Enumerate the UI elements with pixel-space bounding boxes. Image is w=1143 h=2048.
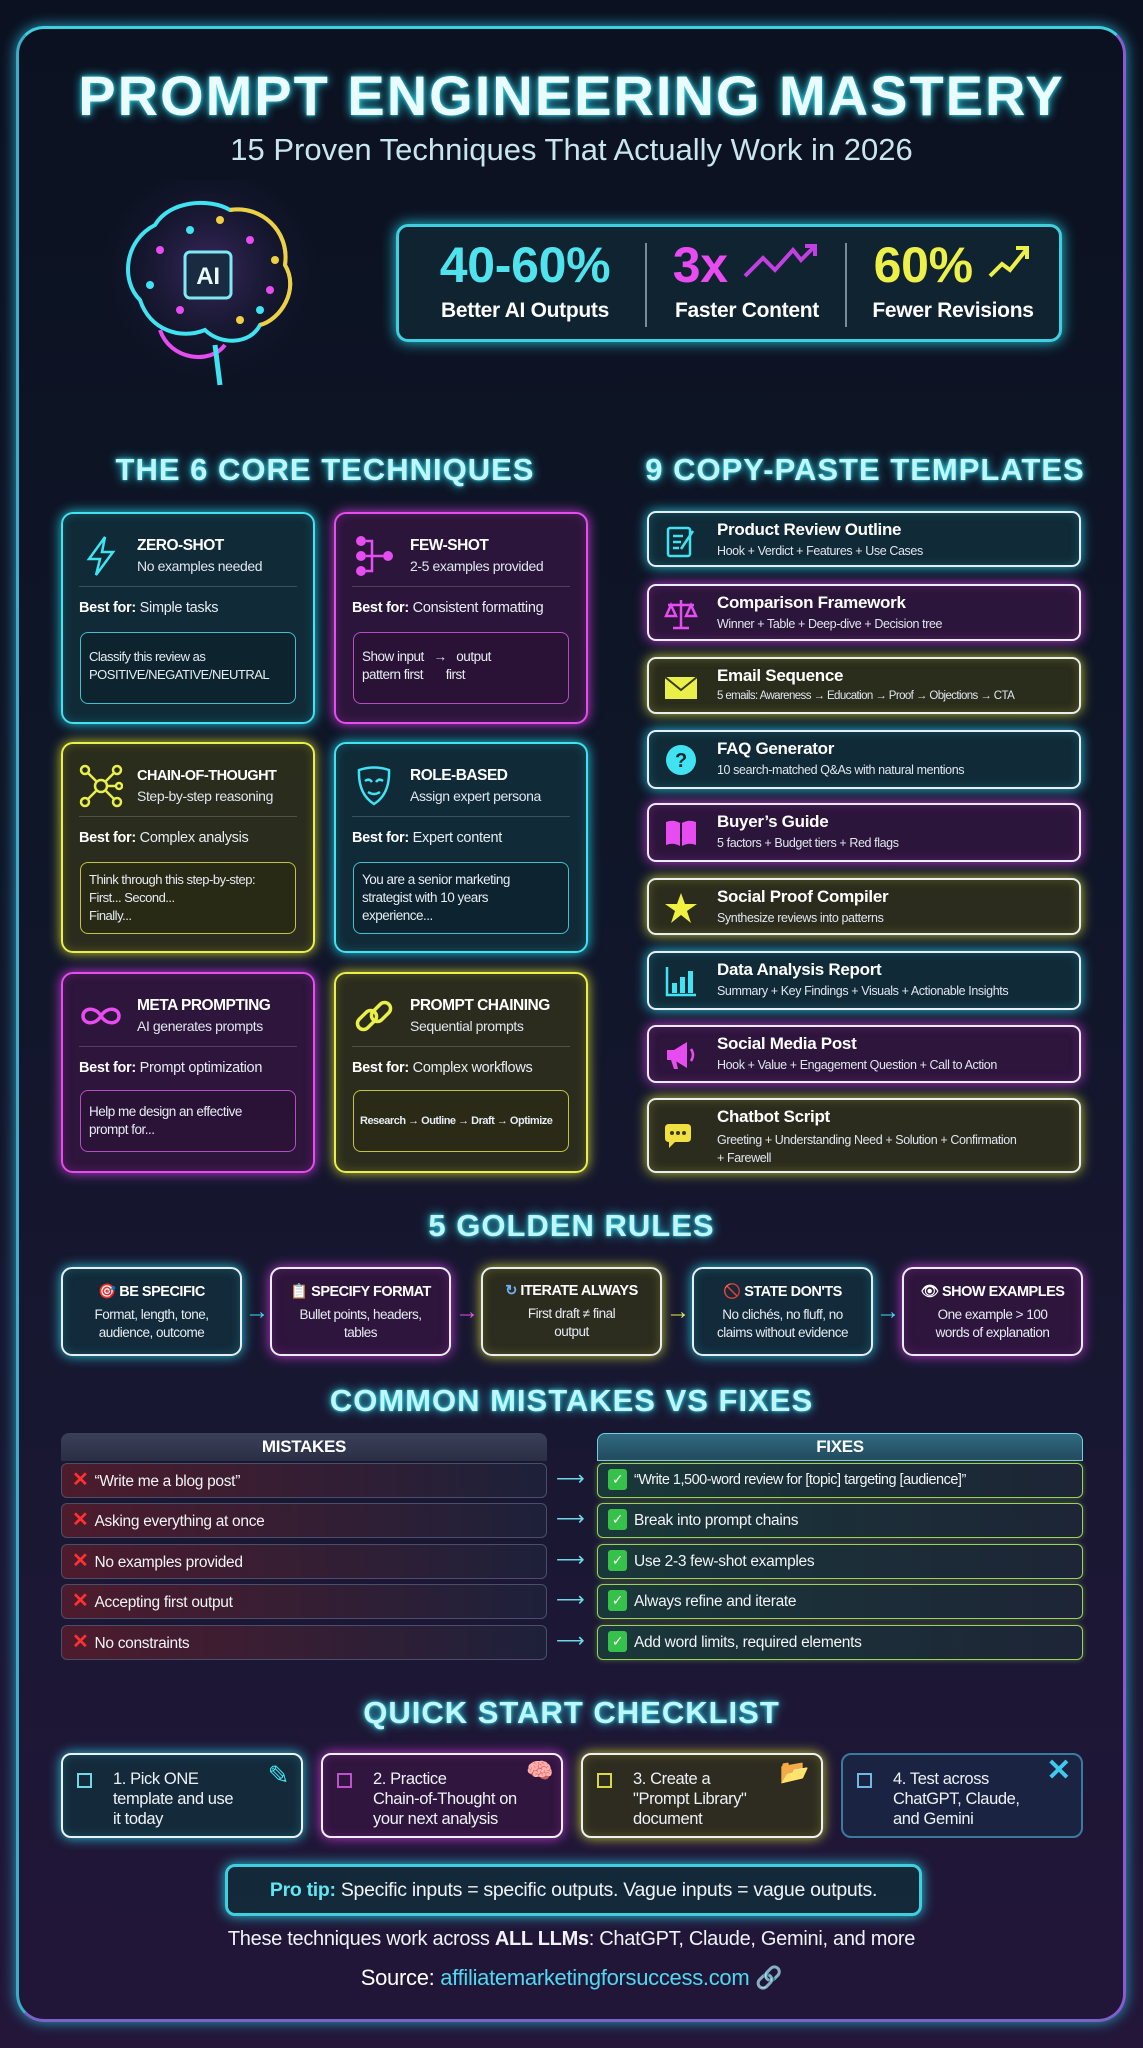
card: role-based: Assign expert persona: [410, 788, 541, 804]
stat: faster content: Faster Content: [675, 299, 819, 322]
arrow: →: [876, 1298, 900, 1325]
source: Source: affiliatemarketingforsuccess.com 🔗: [361, 1965, 782, 1990]
rule: be specific: [61, 1267, 242, 1356]
icon: network: [80, 764, 123, 808]
template: data analysis: Summary + Key Findings + Visuals + Actionable Insights: [717, 984, 1008, 998]
card: meta prompting: Help me design an effective: [89, 1104, 242, 1119]
arrow: →: [245, 1298, 269, 1325]
rule: state don'ts: 🚫 STATE DON'TS: [723, 1284, 842, 1300]
icon: book: [666, 820, 696, 846]
checklist item 4: ChatGPT, Claude,: [893, 1790, 1020, 1808]
checklist item 1: [61, 1753, 303, 1838]
icon: branches: [356, 536, 393, 576]
heading: quick start: QUICK START CHECKLIST: [363, 1695, 780, 1730]
stat: faster content: [673, 237, 819, 322]
icon: infinity: [81, 1008, 121, 1024]
rule: specify format: [270, 1267, 451, 1356]
text: Always refine and iterate: [634, 1593, 796, 1610]
rule: specify format: Bullet points, headers,: [299, 1307, 422, 1322]
template: buyer's guide: [647, 803, 1081, 862]
card: role-based: ROLE-BASED: [410, 767, 507, 784]
text: Use 2-3 few-shot examples: [634, 1553, 814, 1570]
card: zero-shot: [61, 512, 315, 724]
rule: state don'ts: [692, 1267, 873, 1356]
subtitle: 15 Proven Techniques That Actually Work in 2026: [230, 132, 913, 167]
template: data analysis: Data Analysis Report: [717, 960, 881, 979]
checklist item 2: your next analysis: [373, 1810, 498, 1828]
template: buyer's guide: 5 factors + Budget tiers + Red flags: [717, 836, 899, 850]
card: meta prompting: prompt for...: [89, 1122, 155, 1137]
template: email: Email Sequence: [717, 666, 843, 685]
rule: iterate always: First draft ≠ final: [528, 1306, 615, 1321]
icon: AI brain: AI: [196, 263, 220, 290]
text: ⟶: [556, 1630, 584, 1652]
rule: iterate always: ↻ ITERATE ALWAYS: [505, 1283, 638, 1299]
arrow: →: [455, 1298, 479, 1325]
checklist item 1: 1. Pick ONE: [113, 1770, 198, 1788]
checklist item 3: [581, 1753, 823, 1838]
card: few-shot: Best for: Consistent formatting: [352, 600, 543, 616]
stats panel: [396, 224, 1062, 342]
rule: specify format: 📋 SPECIFY FORMAT: [290, 1284, 431, 1300]
text: ✕ Asking everything at once: [72, 1509, 264, 1531]
text: ⟶: [556, 1589, 584, 1611]
template: product review: [647, 511, 1081, 567]
text: ✓: [612, 1592, 623, 1608]
icon: lightning: [86, 536, 116, 576]
card: chain-of-thought: CHAIN-OF-THOUGHT: [137, 768, 276, 784]
stat: faster content: 3x: [673, 237, 728, 293]
checklist item 2: Chain-of-Thought on: [373, 1790, 517, 1808]
stat: fewer revisions: Fewer Revisions: [872, 299, 1034, 322]
text: ✓: [612, 1633, 623, 1649]
icon: AI brain: [126, 192, 292, 386]
card: prompt chaining: Sequential prompts: [410, 1018, 523, 1034]
template: product review: Product Review Outline: [717, 520, 901, 539]
checklist item 4: ✕: [1046, 1754, 1071, 1787]
text: ⟶: [556, 1508, 584, 1530]
card: chain-of-thought: [61, 742, 315, 953]
stat: fewer revisions: [872, 237, 1034, 322]
card: role-based: experience...: [362, 908, 433, 923]
card: role-based: strategist with 10 years: [362, 890, 488, 905]
card: zero-shot: ZERO-SHOT: [137, 537, 224, 554]
card: zero-shot: Best for: Simple tasks: [79, 600, 218, 616]
card: zero-shot: No examples needed: [137, 558, 262, 574]
pro tip callout: Pro tip: Specific inputs = specific outputs. Vague inputs = vague outputs.: [270, 1879, 877, 1901]
rule: be specific: 🎯 BE SPECIFIC: [98, 1284, 205, 1300]
text: ✕ “Write me a blog post”: [72, 1469, 240, 1491]
icon: scales: [664, 600, 698, 630]
checklist item 2: 2. Practice: [373, 1770, 447, 1788]
template: comparison: Winner + Table + Deep-dive + Decision tree: [717, 617, 942, 631]
card: few-shot: [334, 512, 588, 724]
checklist item 4: [841, 1753, 1083, 1838]
pro tip callout: [225, 1864, 922, 1916]
stat: better outputs: [440, 237, 610, 322]
icon: question: [666, 745, 696, 775]
card: role-based: Best for: Expert content: [352, 830, 502, 846]
card: chain-of-thought: Think through this step-by-step:: [89, 872, 255, 887]
card: prompt chaining: PROMPT CHAINING: [410, 997, 550, 1014]
template: social media: [647, 1025, 1081, 1083]
heading: mistakes vs fixes: COMMON MISTAKES VS FIXES: [330, 1383, 813, 1418]
card: few-shot: pattern first first: [362, 667, 465, 682]
heading: core techniques: THE 6 CORE TECHNIQUES: [116, 452, 534, 487]
template: email: [647, 657, 1081, 714]
rule: state don'ts: No clichés, no fluff, no: [722, 1307, 843, 1322]
text: ⟶: [556, 1549, 584, 1571]
card: prompt chaining: Best for: Complex workflows: [352, 1060, 532, 1076]
checklist item 3: 3. Create a: [633, 1770, 710, 1788]
title: PROMPT ENGINEERING MASTERY: [78, 64, 1065, 127]
checklist item 4: and Gemini: [893, 1810, 973, 1828]
template: faq: FAQ Generator: [717, 739, 834, 758]
heading: templates: 9 COPY-PASTE TEMPLATES: [645, 452, 1085, 487]
icon: megaphone: [667, 1042, 694, 1069]
template: chatbot: Greeting + Understanding Need + Solution + Confirmation: [717, 1133, 1016, 1147]
template: email: 5 emails: Awareness → Education → Proof → Objections → CTA: [717, 690, 1014, 702]
stat: better outputs: Better AI Outputs: [441, 299, 609, 322]
rule: show examples: 👁 SHOW EXAMPLES: [921, 1284, 1064, 1300]
text: ✓: [612, 1552, 623, 1568]
rule: be specific: Format, length, tone,: [94, 1307, 209, 1322]
card: zero-shot: POSITIVE/NEGATIVE/NEUTRAL: [89, 667, 269, 682]
checklist item 2: [321, 1753, 563, 1838]
template: chatbot: + Farewell: [717, 1151, 771, 1165]
stat: fewer revisions: 60%: [874, 237, 973, 293]
arrow: →: [666, 1298, 690, 1325]
template: product review: Hook + Verdict + Features + Use Cases: [717, 544, 923, 558]
card: meta prompting: AI generates prompts: [137, 1018, 263, 1034]
card: role-based: [334, 742, 588, 953]
text: ✕ No examples provided: [72, 1550, 243, 1572]
card: chain-of-thought: Finally...: [89, 908, 131, 923]
checklist item 1: ✎: [268, 1760, 289, 1790]
template: chatbot: Chatbot Script: [717, 1107, 830, 1126]
icon: star: [665, 893, 697, 923]
checklist item 1: it today: [113, 1810, 163, 1828]
header: mistakes: [61, 1433, 547, 1461]
text: ✓: [612, 1511, 623, 1527]
text: Break into prompt chains: [634, 1512, 798, 1529]
text: ✓: [612, 1471, 623, 1487]
checklist item 3: 📂: [780, 1759, 809, 1786]
header: mistakes: MISTAKES: [262, 1437, 346, 1456]
template: social proof: Social Proof Compiler: [717, 887, 888, 906]
text: Add word limits, required elements: [634, 1634, 862, 1651]
template: faq: [647, 730, 1081, 789]
rule: state don'ts: claims without evidence: [717, 1325, 848, 1340]
icon: bar chart: [666, 967, 696, 996]
rule: iterate always: output: [554, 1324, 589, 1339]
icon: chain link: [356, 1000, 392, 1032]
text: “Write 1,500-word review for [topic] targeting [audience]”: [634, 1472, 966, 1488]
checklist item 3: document: [633, 1810, 702, 1828]
rule: show examples: words of explanation: [936, 1325, 1049, 1340]
stat: better outputs: 40-60%: [440, 237, 610, 293]
template: faq: 10 search-matched Q&As with natural mentions: [717, 763, 964, 777]
table: mistakes vs fixes: [61, 1433, 1083, 1461]
template: social proof: [647, 878, 1081, 935]
icon: question: ?: [675, 750, 687, 772]
checklist item 3: "Prompt Library": [633, 1790, 747, 1808]
text: ⟶: [556, 1468, 584, 1490]
rule: iterate always: [481, 1267, 662, 1356]
card: few-shot: Show input → output: [362, 649, 491, 664]
rule: show examples: One example > 100: [938, 1307, 1047, 1322]
text: ✕ Accepting first output: [72, 1590, 233, 1612]
heading: golden rules: 5 GOLDEN RULES: [428, 1208, 715, 1243]
icon: chat bubbles: [665, 1124, 691, 1148]
template: social media: Social Media Post: [717, 1034, 856, 1053]
card: prompt chaining: [334, 972, 588, 1173]
card: few-shot: FEW-SHOT: [410, 537, 488, 554]
footer note: These techniques work across ALL LLMs: ChatGPT, Claude, Gemini, and more: [228, 1928, 915, 1950]
card: chain-of-thought: Step-by-step reasoning: [137, 788, 273, 804]
card: few-shot: 2-5 examples provided: [410, 558, 543, 574]
checklist item 2: 🧠: [526, 1758, 553, 1783]
template: comparison: Comparison Framework: [717, 593, 906, 612]
rule: specify format: tables: [344, 1325, 377, 1340]
text: ✕ No constraints: [72, 1631, 189, 1653]
card: zero-shot: Classify this review as: [89, 649, 205, 664]
template: data analysis: [647, 951, 1081, 1010]
card: chain-of-thought: First... Second...: [89, 890, 175, 905]
card: chain-of-thought: Best for: Complex analysis: [79, 830, 248, 846]
checklist item 4: 4. Test across: [893, 1770, 989, 1788]
template: social proof: Synthesize reviews into patterns: [717, 911, 883, 925]
header: fixes: FIXES: [816, 1437, 864, 1456]
rule: show examples: [902, 1267, 1083, 1356]
icon: mask: [358, 766, 390, 806]
rule: be specific: audience, outcome: [99, 1325, 204, 1340]
header: fixes: [597, 1433, 1083, 1461]
card: meta prompting: META PROMPTING: [137, 997, 270, 1014]
template: comparison: [647, 584, 1081, 641]
card: meta prompting: [61, 972, 315, 1173]
icon: envelope: [664, 676, 698, 699]
card: meta prompting: Best for: Prompt optimization: [79, 1060, 262, 1076]
card: role-based: You are a senior marketing: [362, 872, 510, 887]
card: prompt chaining: Research → Outline → Draft → Optimize: [360, 1115, 552, 1127]
template: buyer's guide: Buyer’s Guide: [717, 812, 828, 831]
template: social media: Hook + Value + Engagement Question + Call to Action: [717, 1058, 997, 1072]
template: chatbot: [647, 1098, 1081, 1173]
icon: notepad: [666, 526, 694, 558]
checklist item 1: template and use: [113, 1790, 233, 1808]
